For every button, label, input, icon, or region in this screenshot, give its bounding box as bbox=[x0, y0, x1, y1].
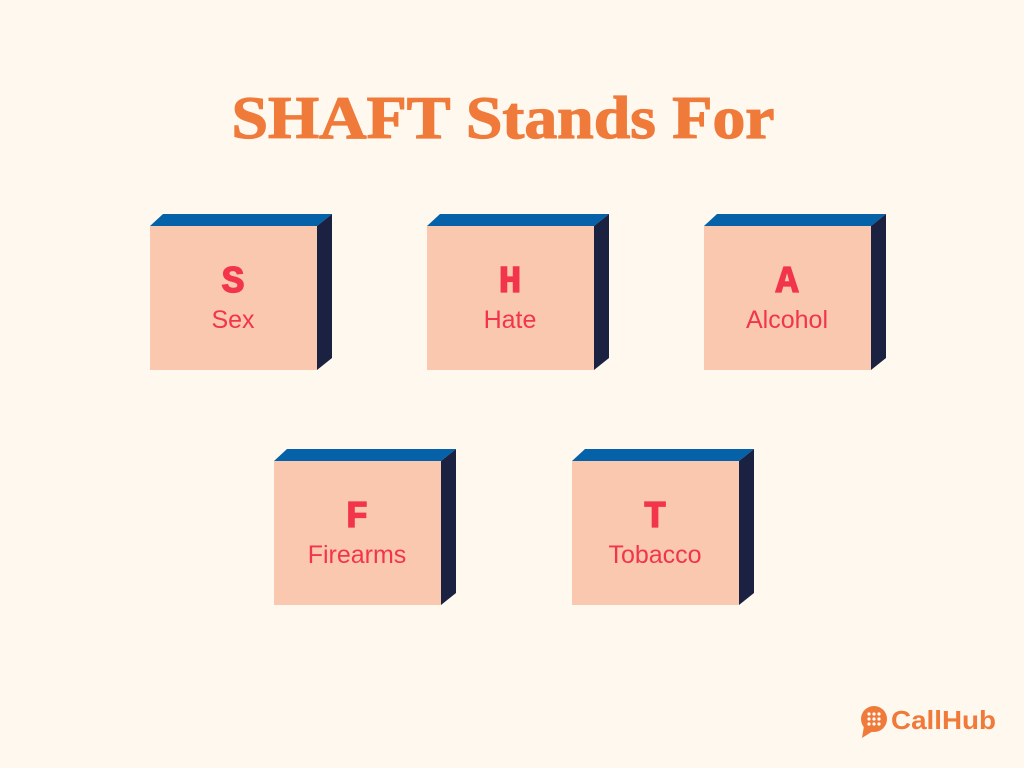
box: T Tobacco: Tobacco bbox=[608, 541, 702, 569]
box: F Firearms: Firearms bbox=[308, 541, 406, 569]
box: T Tobacco bbox=[572, 449, 754, 605]
box: F Firearms bbox=[274, 449, 456, 605]
box: T Tobacco: T bbox=[644, 496, 666, 539]
box: H Hate bbox=[427, 214, 609, 370]
logo: CallHub: CallHub bbox=[891, 705, 996, 735]
box: A Alcohol: Alcohol bbox=[746, 306, 828, 334]
title: SHAFT Stands For bbox=[232, 85, 774, 151]
logo: CallHub bbox=[861, 705, 996, 738]
box: S Sex: Sex bbox=[211, 306, 255, 334]
box: A Alcohol bbox=[704, 214, 886, 370]
box: H Hate: Hate bbox=[484, 306, 536, 334]
box: A Alcohol: A bbox=[776, 261, 799, 304]
box: S Sex: S bbox=[222, 261, 244, 304]
box: F Firearms: F bbox=[346, 496, 368, 539]
box: S Sex bbox=[150, 214, 332, 370]
box: H Hate: H bbox=[499, 261, 521, 304]
